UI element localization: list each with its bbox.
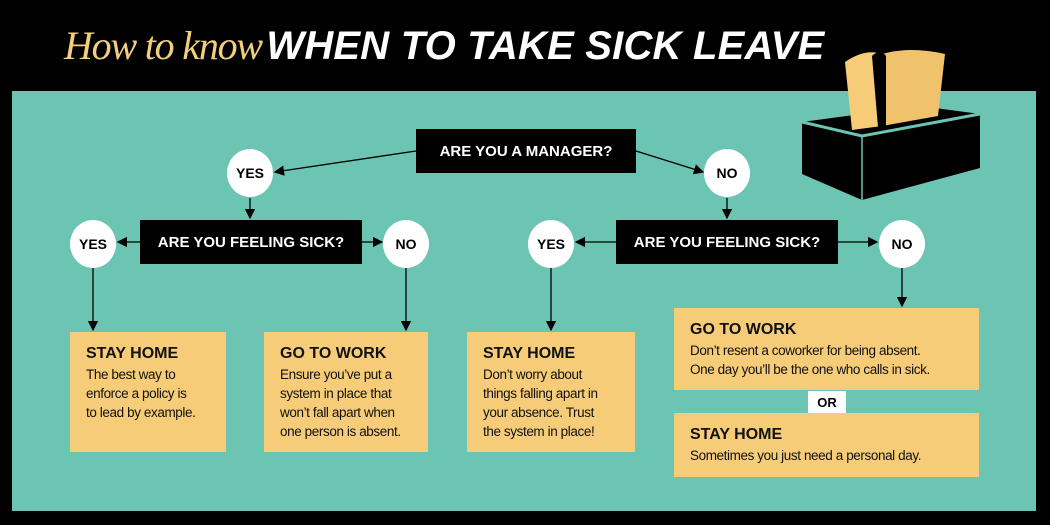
circle yes	[70, 220, 116, 268]
circle no: NO	[396, 236, 416, 252]
icon: tissue box	[802, 50, 980, 200]
circle no	[879, 220, 925, 268]
card: stay home employee: Don’t worry about	[483, 367, 582, 382]
card: stay home personal day	[674, 413, 979, 477]
circle yes: YES	[79, 236, 107, 252]
no circle top: NO	[716, 165, 738, 181]
card: stay home personal day: STAY HOME	[690, 426, 782, 443]
card: stay home employee: STAY HOME	[483, 345, 575, 362]
circle no	[383, 220, 429, 268]
or label	[808, 391, 846, 413]
card: go to work employee: Don’t resent a coworker for being absent.	[690, 343, 920, 358]
card: go to work manager: Ensure you’ve put a	[280, 367, 392, 382]
card: stay home employee	[467, 332, 635, 452]
card: stay home manager: STAY HOME	[86, 345, 178, 362]
card: stay home employee: things falling apart in	[483, 386, 598, 401]
card: stay home personal day: Sometimes you just need a personal day.	[690, 448, 921, 463]
card: go to work manager: won’t fall apart when	[280, 405, 395, 420]
card: stay home manager: The best way to	[86, 367, 175, 382]
card: go to work manager: one person is absent.	[280, 424, 401, 439]
yes circle top	[227, 149, 273, 197]
panel: teal background	[12, 91, 1036, 511]
circle yes: YES	[537, 236, 565, 252]
no circle top	[704, 149, 750, 197]
question: feeling sick left: ARE YOU FEELING SICK?	[158, 234, 344, 250]
card: stay home manager: to lead by example.	[86, 405, 195, 420]
card: stay home manager	[70, 332, 226, 452]
card: go to work manager: GO TO WORK	[280, 345, 386, 362]
card: go to work employee: One day you’ll be the one who calls in sick.	[690, 362, 930, 377]
question: feeling sick right: ARE YOU FEELING SICK?	[634, 234, 820, 250]
card: go to work manager	[264, 332, 428, 452]
circle yes	[528, 220, 574, 268]
yes circle top: YES	[236, 165, 264, 181]
card: stay home employee: your absence. Trust	[483, 405, 594, 420]
question: feeling sick left	[140, 220, 362, 264]
card: go to work employee: GO TO WORK	[690, 321, 796, 338]
card: stay home manager: enforce a policy is	[86, 386, 186, 401]
circle no: NO	[892, 236, 912, 252]
card: go to work manager: system in place that	[280, 386, 391, 401]
title: How to know WHEN TO TAKE SICK LEAVE	[64, 23, 824, 68]
card: stay home employee: the system in place!	[483, 424, 594, 439]
question: manager	[416, 129, 636, 173]
card: go to work employee	[674, 308, 979, 390]
question: manager: ARE YOU A MANAGER?	[440, 142, 612, 160]
or label: OR	[817, 394, 837, 410]
question: feeling sick right	[616, 220, 838, 264]
